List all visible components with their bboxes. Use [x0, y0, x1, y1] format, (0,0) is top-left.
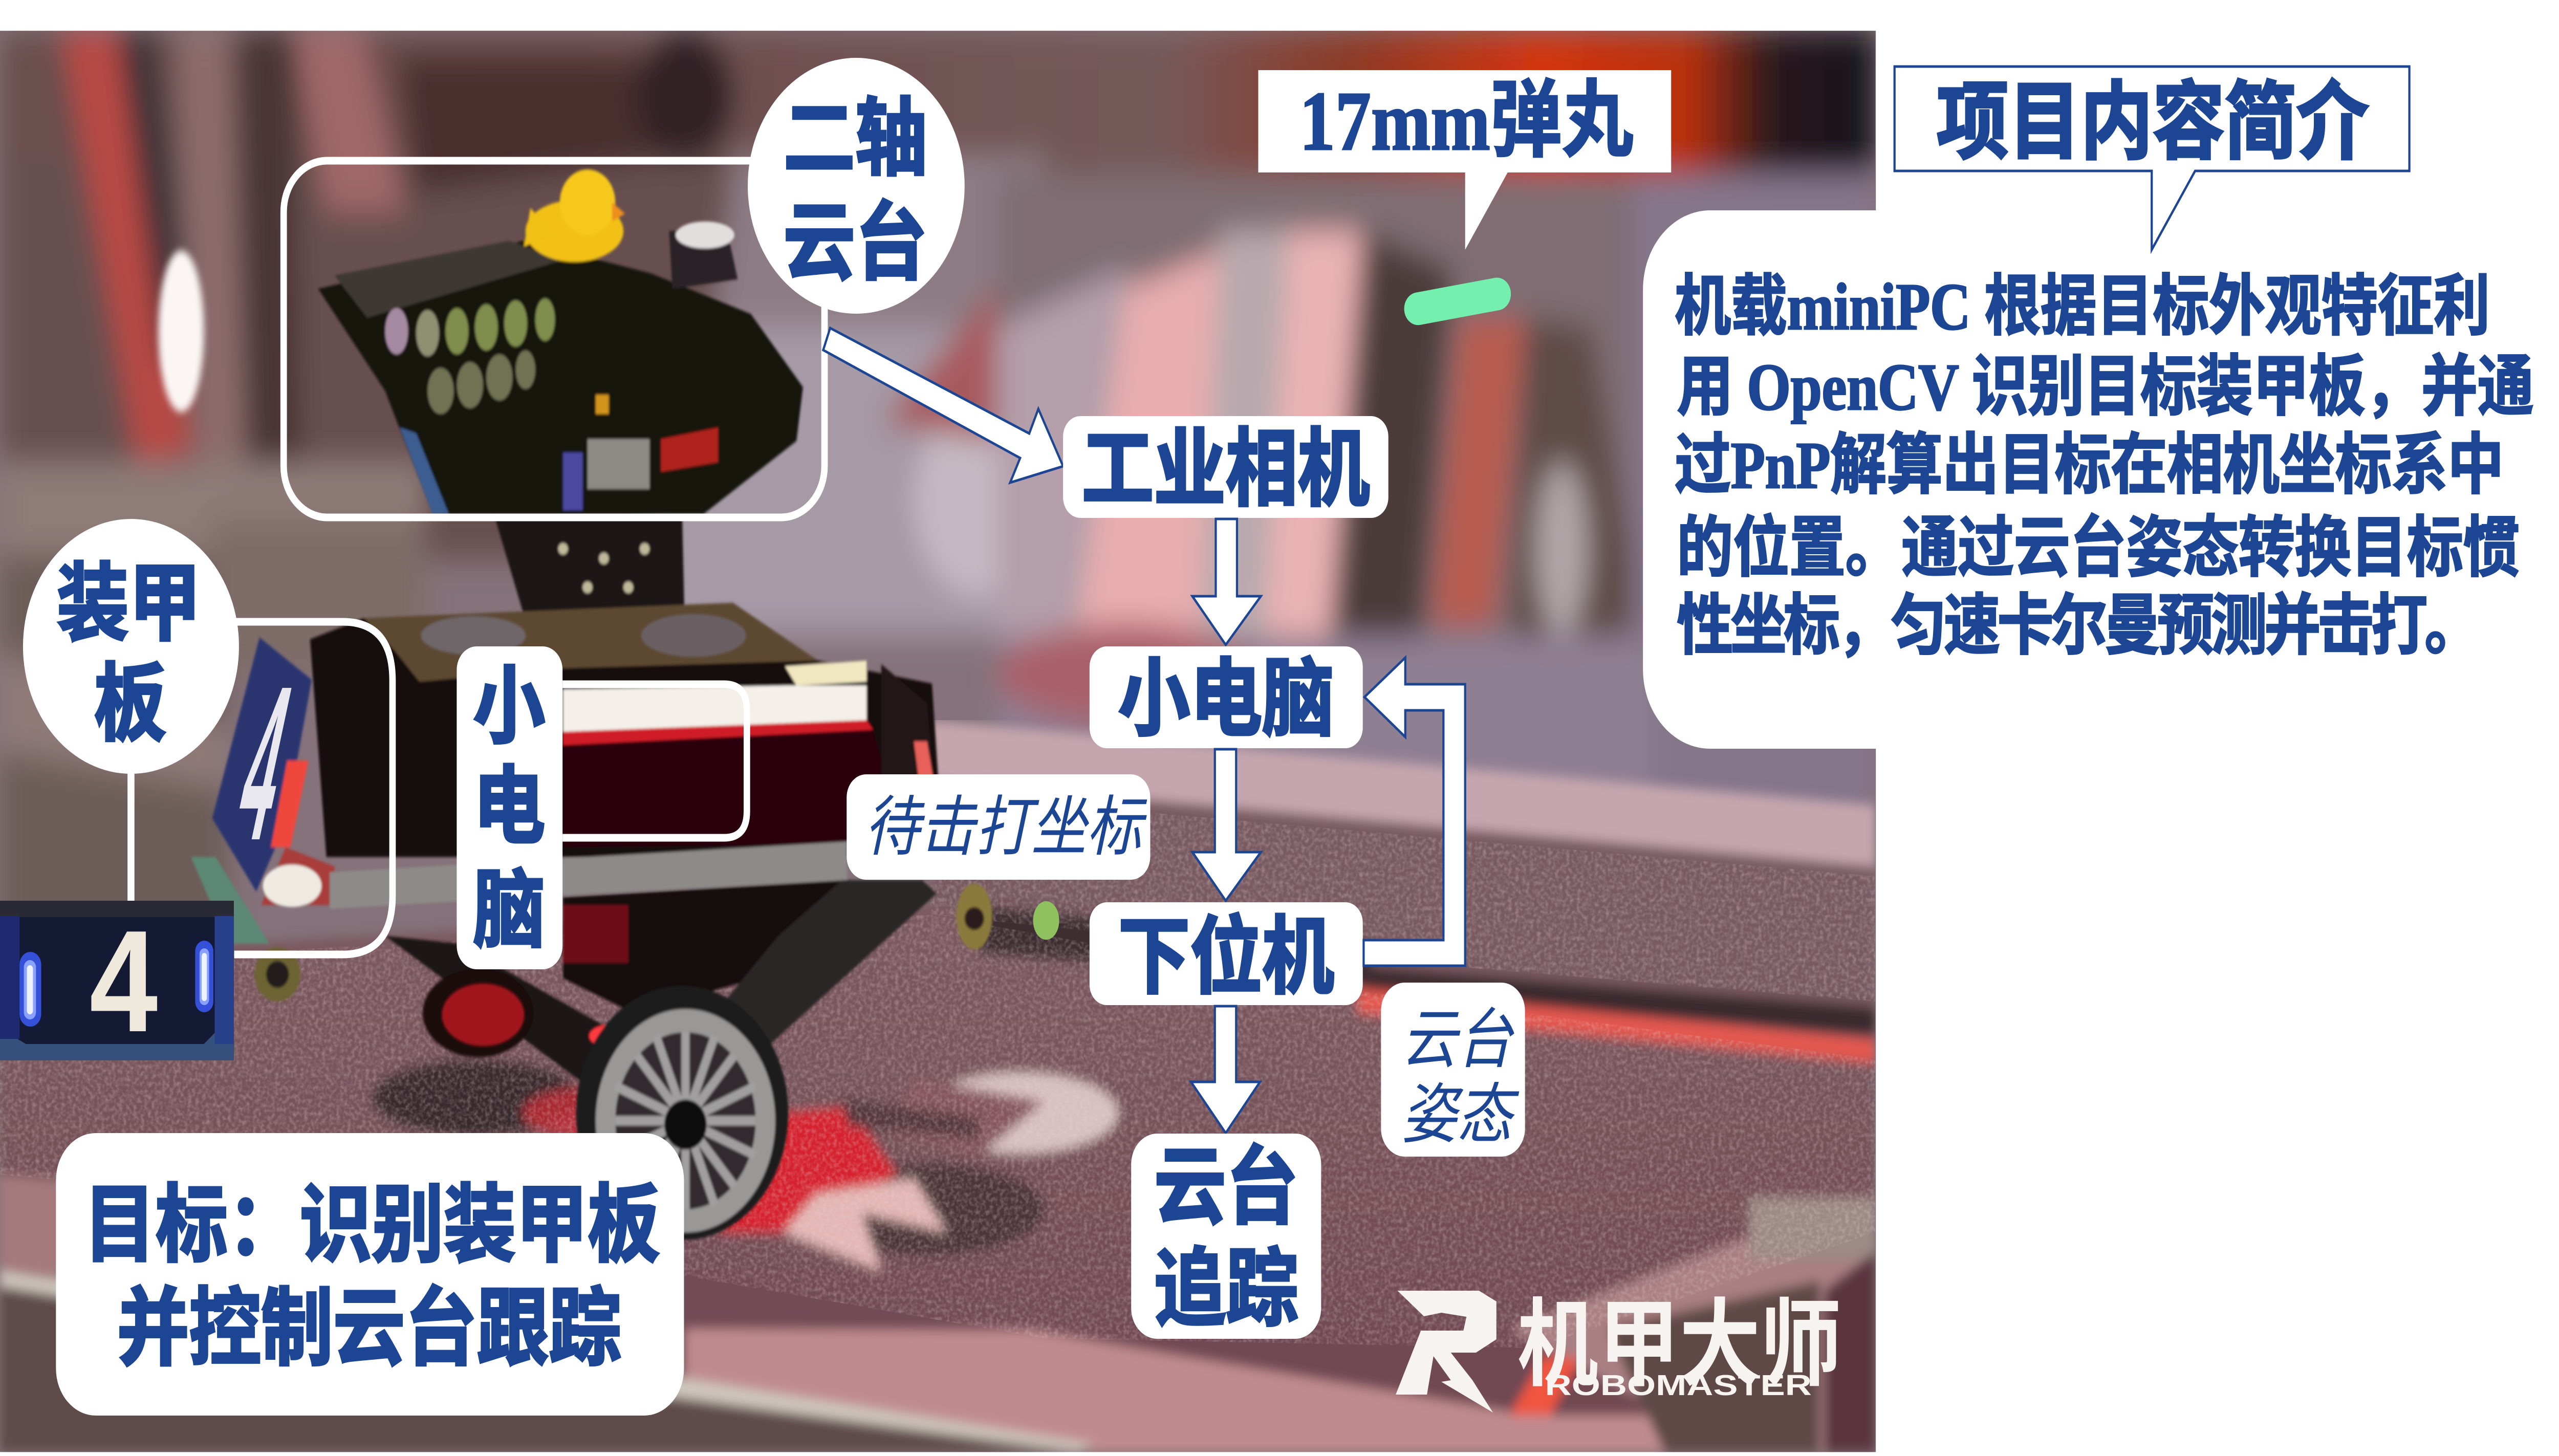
- armour frame: [234, 622, 393, 954]
- arrow: gimbal to camera: [823, 328, 1063, 483]
- small computer frame: [562, 684, 747, 838]
- tower: [494, 516, 685, 664]
- description panel: 用 OpenCV 识别目标装甲板，并通: [1677, 351, 2534, 424]
- small green ball: [1033, 901, 1059, 940]
- armour inset photo: 4: [90, 900, 159, 1062]
- armour bubble: 装甲: [57, 556, 201, 651]
- label: coordinates to hit: [847, 774, 1150, 880]
- armour connector line: [127, 768, 135, 906]
- chassis: [310, 603, 943, 857]
- goal box: 目标：识别装甲板: [84, 1178, 660, 1273]
- flow box: small computer: 小电脑: [1118, 651, 1334, 747]
- green projectile light: [1402, 275, 1513, 328]
- flow box: gimbal tracking: [1131, 1134, 1321, 1339]
- armour number on robot panel: 4: [222, 641, 308, 886]
- goal box: 并控制云台跟踪: [117, 1281, 621, 1376]
- title callout: 项目内容简介: [1937, 75, 2369, 170]
- gimbal frame: [284, 161, 825, 517]
- description panel: 的位置。通过云台姿态转换目标惯: [1677, 512, 2520, 585]
- title callout: [1895, 67, 2410, 250]
- small computer vertical label: 脑: [473, 863, 545, 958]
- floor speckle: [0, 915, 1875, 1348]
- feedback arrow: [1363, 658, 1465, 966]
- gimbal bubble: [748, 58, 965, 314]
- description panel: 机载miniPC 根据目标外观特征利: [1675, 271, 2490, 344]
- wheels: [957, 884, 992, 949]
- flow box: gimbal tracking: 追踪: [1154, 1242, 1298, 1337]
- small computer vertical label: [457, 646, 562, 969]
- blurred white lamp: [158, 250, 204, 412]
- callout: 17mm projectile: [1258, 70, 1671, 250]
- logo: RoboMaster: 机甲大师: [1517, 1291, 1841, 1398]
- gimbal: [318, 241, 803, 514]
- description panel: [1643, 210, 2549, 749]
- gray beam: [330, 841, 847, 909]
- flow box: gimbal tracking: 云台: [1154, 1140, 1298, 1235]
- armour bubble: 板: [94, 657, 166, 752]
- small computer vertical label: 电: [473, 759, 545, 854]
- armour bubble: [23, 519, 239, 774]
- label: gimbal attitude: [1381, 983, 1525, 1157]
- label: gimbal attitude: 云台: [1401, 1004, 1514, 1076]
- duck: [526, 200, 623, 262]
- label: gimbal attitude: 姿态: [1401, 1079, 1520, 1151]
- arrow: camera to computer: [1192, 519, 1261, 645]
- wall speckle: [930, 793, 1875, 1002]
- arrow: lower controller to tracking: [1191, 1006, 1260, 1133]
- logo: RoboMaster: ROBOMASTER: [1545, 1369, 1812, 1402]
- small computer vertical label: 小: [473, 659, 545, 754]
- description panel: 过PnP解算出目标在相机坐标系中: [1675, 429, 2504, 503]
- armour inset photo: [0, 900, 234, 1062]
- goal box: [56, 1133, 684, 1416]
- armor side panel: [212, 637, 312, 892]
- label: coordinates to hit: 待击打坐标: [864, 791, 1147, 864]
- underframe: [563, 880, 847, 1013]
- arrow: computer to lower controller: [1192, 749, 1261, 901]
- photo background: robot on arena: [0, 31, 1876, 1452]
- callout: 17mm projectile: 17mm弹丸: [1299, 75, 1633, 168]
- gimbal bubble: 云台: [784, 195, 927, 291]
- flow box: lower controller: 下位机: [1118, 909, 1334, 1005]
- description panel: 性坐标，匀速卡尔曼预测并击打。: [1677, 590, 2481, 663]
- gimbal bubble: 二轴: [784, 91, 927, 186]
- logo: RoboMaster: [1396, 1291, 1841, 1412]
- flow box: industrial camera: 工业相机: [1082, 422, 1370, 517]
